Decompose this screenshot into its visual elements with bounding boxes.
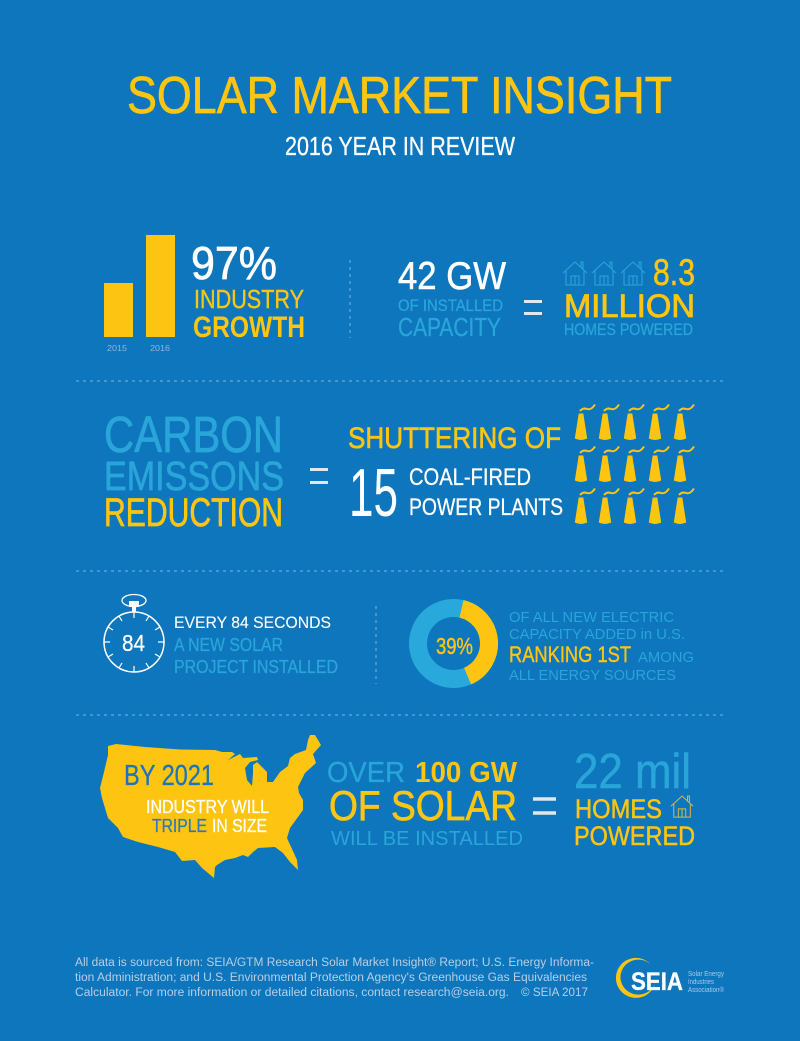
- footer: sources: tion Administration; and U.S. Environmental Protection Agency's Greenhouse Gas Equivalencies: [75, 972, 587, 984]
- icon: three houses: [563, 262, 645, 285]
- logo: SEIA: Industries: [688, 979, 714, 986]
- equals sign: [533, 799, 556, 813]
- text: of all new electric: OF ALL NEW ELECTRIC: [509, 609, 674, 626]
- footer: sources: © SEIA 2017: [521, 987, 588, 999]
- label: of installed: OF INSTALLED: [398, 296, 503, 315]
- panel: installed capacity: [398, 252, 695, 342]
- text: 100 GW: 100 GW: [415, 757, 518, 789]
- footer: sources: [75, 957, 594, 999]
- text: every 84 seconds: EVERY 84 SECONDS: [174, 613, 331, 632]
- panel: industry growth: [104, 235, 305, 353]
- icon: stopwatch: 84: [122, 630, 145, 656]
- stat: million: MILLION: [564, 288, 695, 324]
- text: will be installed: WILL BE INSTALLED: [331, 828, 523, 850]
- footer: sources: Calculator. For more information or detailed citations, contact research@seia.org.: [75, 987, 509, 999]
- text: over: OVER: [327, 757, 405, 789]
- icon: house: [671, 796, 693, 817]
- equals sign: [310, 470, 328, 482]
- text: among: AMONG: [638, 649, 694, 666]
- subtitle: 2016 YEAR IN REVIEW: [285, 131, 515, 161]
- stat: 15: 15: [349, 455, 398, 531]
- heading: carbon: CARBON: [104, 406, 283, 463]
- icon: stopwatch: [104, 594, 164, 672]
- bar chart: [104, 235, 175, 353]
- icon: power plant grid: [575, 404, 694, 524]
- panel: by 2021: [100, 735, 695, 878]
- text: powered: POWERED: [574, 821, 695, 851]
- stat: 42 GW: 42 GW: [398, 255, 506, 298]
- text: coal-fired: COAL-FIRED: [409, 464, 531, 491]
- label: industry: INDUSTRY: [194, 284, 304, 314]
- panel: every 84 seconds: [104, 594, 338, 677]
- text: a new solar: A NEW SOLAR: [174, 635, 283, 655]
- text: homes: HOMES: [575, 794, 662, 824]
- text: power plants: POWER PLANTS: [409, 494, 563, 521]
- bar chart: 2015: [107, 343, 127, 353]
- map: united states: TRIPLE: [152, 816, 207, 836]
- bar chart: 2016: [150, 343, 170, 353]
- heading: reduction: REDUCTION: [104, 491, 283, 535]
- text: shuttering of: SHUTTERING OF: [348, 422, 561, 455]
- stat: 97%: 97%: [191, 237, 277, 289]
- text: capacity added: CAPACITY ADDED in U.S.: [509, 626, 685, 643]
- map: united states: BY 2021: [124, 760, 214, 792]
- heading: emissons: EMISSONS: [104, 453, 284, 499]
- equals sign: [524, 302, 542, 314]
- panel: 39 percent of new capacity: [418, 608, 694, 684]
- text: all energy sources: ALL ENERGY SOURCES: [509, 667, 676, 684]
- title: SOLAR MARKET INSIGHT: [127, 67, 672, 125]
- label: capacity: CAPACITY: [398, 312, 501, 342]
- map: united states: IN SIZE: [212, 816, 267, 836]
- donut chart: 39%: [436, 633, 473, 659]
- map: united states: INDUSTRY WILL: [146, 797, 269, 817]
- panel: carbon emissions: [104, 404, 694, 535]
- text: project installed: PROJECT INSTALLED: [174, 657, 338, 677]
- map: united states: [100, 735, 321, 878]
- stat: 8.3: 8.3: [653, 252, 695, 293]
- label: growth: GROWTH: [193, 311, 305, 344]
- logo: SEIA: [616, 958, 725, 998]
- logo: SEIA: Association®: [688, 986, 725, 994]
- label: homes powered: HOMES POWERED: [564, 321, 693, 339]
- stat: 22 mil: 22 mil: [574, 745, 691, 799]
- text: ranking 1st: RANKING 1ST: [509, 642, 631, 667]
- donut chart: [418, 608, 489, 679]
- logo: SEIA: Solar Energy: [688, 971, 724, 978]
- logo: SEIA: SEIA: [631, 968, 683, 996]
- footer: sources: All data is sourced from: SEIA/GTM Research Solar Market Insight® Report; U.S. Energy Informa-: [75, 957, 594, 969]
- text: of solar: OF SOLAR: [329, 782, 517, 829]
